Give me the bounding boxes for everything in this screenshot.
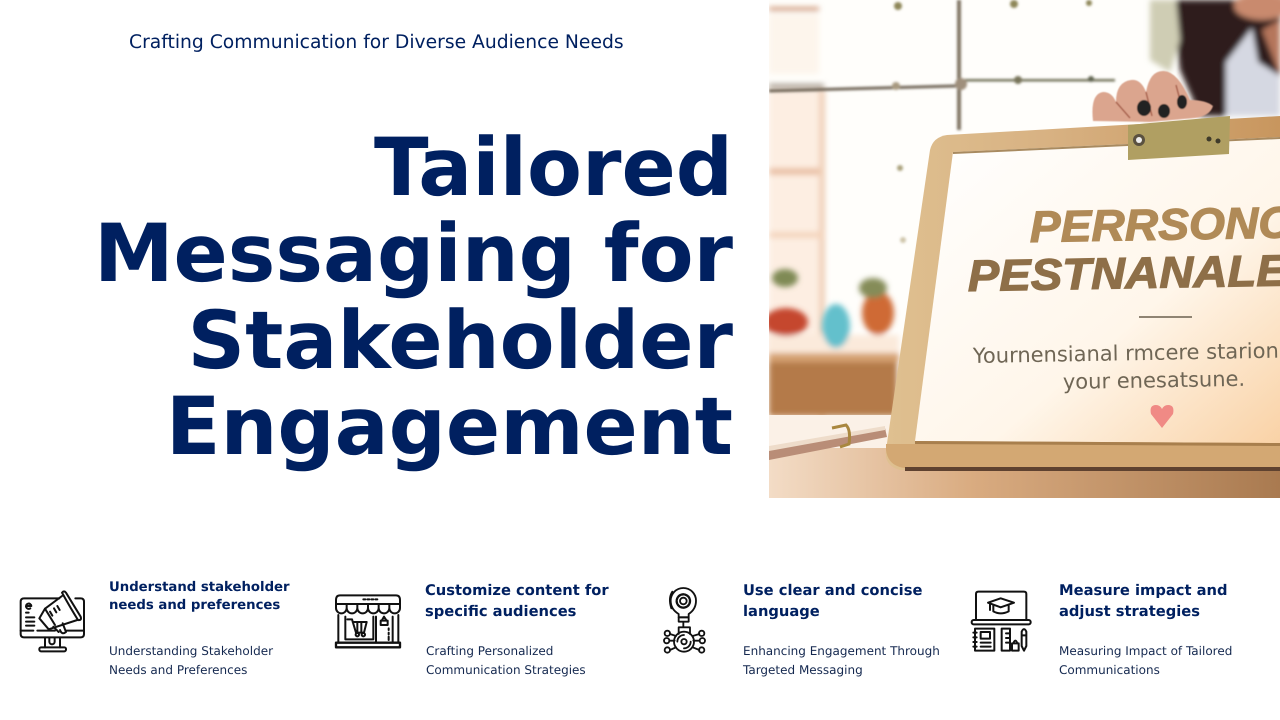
description: Communications (1059, 663, 1160, 677)
description: Crafting Personalized (426, 644, 553, 658)
title: Messaging for (94, 207, 733, 300)
icon: monitor with megaphone (20, 590, 85, 652)
title: Engagement (166, 380, 733, 473)
description (426, 644, 586, 677)
heading: Customize content for (425, 582, 609, 599)
item 1: understand stakeholder needs (20, 580, 290, 677)
heading: adjust strategies (1059, 603, 1200, 620)
item 4: measure impact (970, 582, 1232, 677)
icon: laptop with graduation cap and stationery (970, 590, 1032, 652)
photo: hand holding personalised message board (769, 0, 1280, 498)
heading: language (743, 603, 820, 620)
heading (109, 580, 290, 613)
description: Needs and Preferences (109, 663, 247, 677)
tabletop (769, 415, 899, 455)
icon: light bulb gear with network (663, 587, 706, 654)
description (742, 644, 940, 677)
icon: storefront with cart (334, 594, 402, 648)
heading (425, 582, 609, 620)
title: Tailored (374, 121, 733, 214)
heading: specific audiences (425, 603, 576, 620)
board text: PERRSONC (1029, 198, 1280, 252)
item 2: customize content (334, 582, 609, 677)
description: Communication Strategies (426, 663, 586, 677)
hair and shirt (1150, 0, 1280, 116)
heading: Measure impact and (1059, 582, 1228, 599)
photo: hand holding personalised message board: Yournensianal rmcere starion (972, 339, 1279, 368)
heading: needs and preferences (109, 598, 280, 613)
clip (1128, 116, 1230, 160)
description (109, 644, 274, 677)
hand (1092, 71, 1213, 122)
title: Stakeholder (188, 294, 733, 387)
description: Measuring Impact of Tailored (1059, 644, 1232, 658)
item 3: clear language (663, 582, 940, 677)
heading: Use clear and concise (743, 582, 922, 599)
heading (743, 582, 922, 620)
description (1059, 644, 1232, 677)
heading (1059, 582, 1228, 620)
photo: hand holding personalised message board: your enesatsune. (1063, 367, 1245, 394)
photo: hand holding personalised message board: PESTNANALE (967, 246, 1280, 301)
shelf and plants (764, 269, 899, 416)
description: Targeted Messaging (743, 663, 863, 677)
description: Understanding Stakeholder (109, 644, 273, 658)
heading: Understand stakeholder (109, 580, 290, 595)
board frame (886, 116, 1280, 470)
description: Enhancing Engagement Through (743, 644, 940, 658)
subtitle: Crafting Communication for Diverse Audience Needs (129, 32, 624, 53)
title (94, 121, 733, 473)
